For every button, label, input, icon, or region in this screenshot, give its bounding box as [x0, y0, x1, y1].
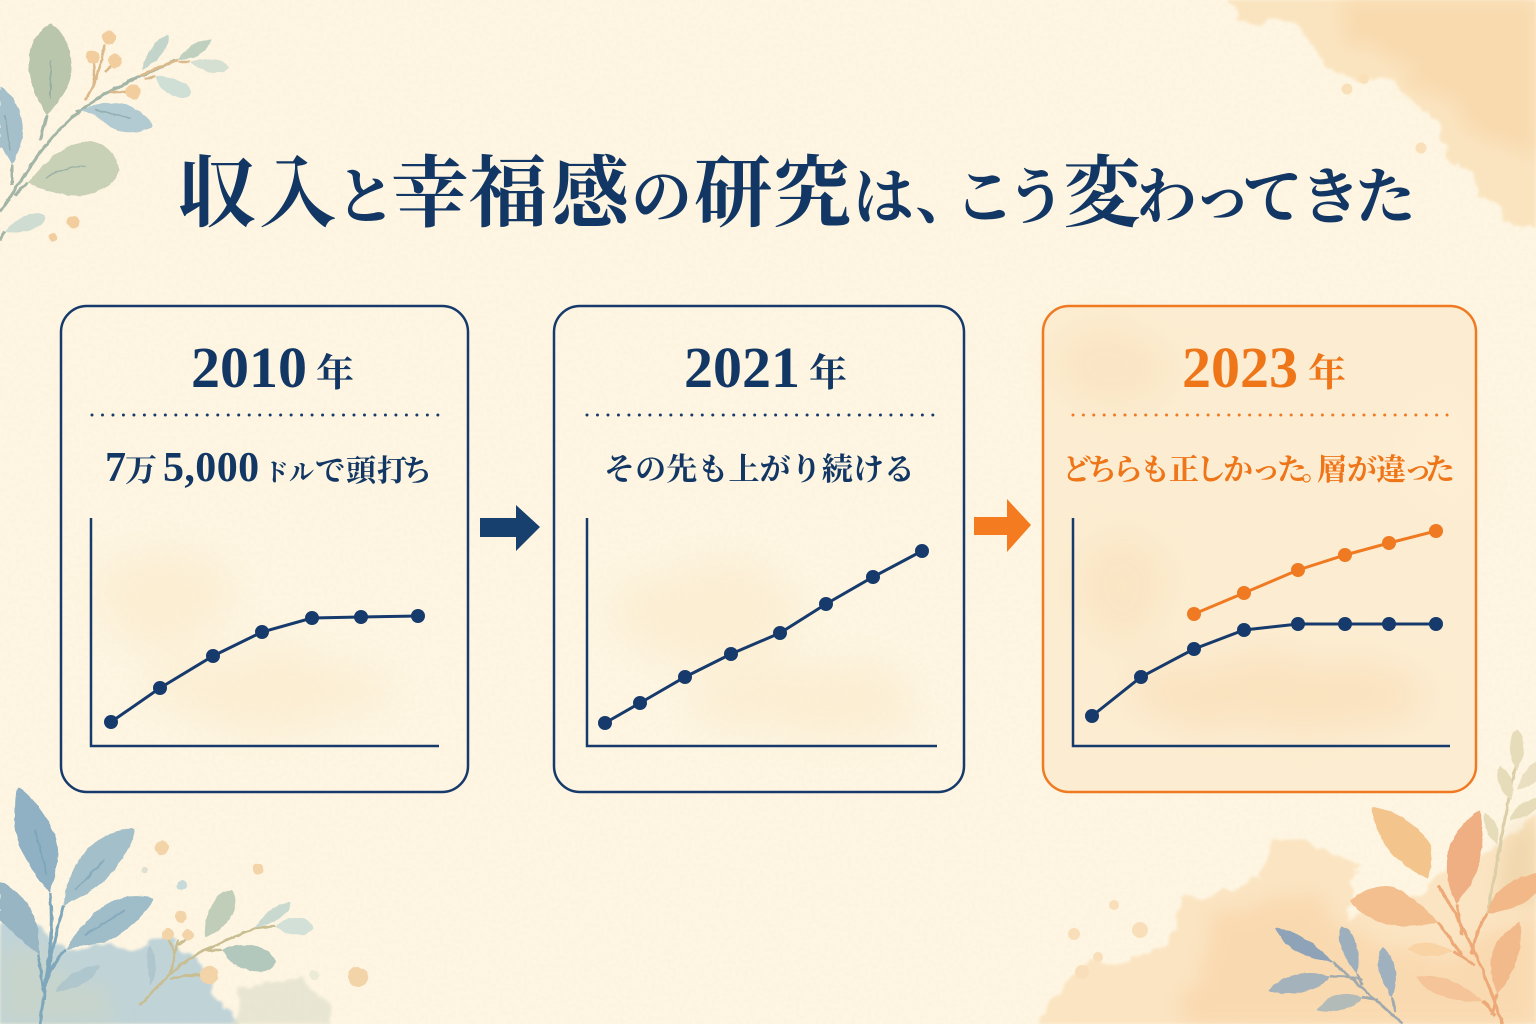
heading 2021: 年 — [809, 353, 847, 395]
veins — [35, 830, 125, 935]
arrow: 2010 to 2021 — [480, 505, 540, 551]
foliage: bottom left — [0, 787, 368, 1024]
caption 2023: どちらも正しかった。層が違った — [1062, 454, 1455, 487]
dotted divider 2023 — [1073, 414, 1448, 416]
blue sprig — [1268, 926, 1402, 1024]
line chart 2010 — [91, 518, 439, 746]
line chart 2023 — [1073, 518, 1450, 746]
watercolor wash: bottom right — [1030, 800, 1536, 1024]
arrow: 2021 to 2023 — [974, 499, 1031, 552]
stems — [0, 60, 175, 212]
leaves — [1372, 807, 1432, 879]
chart wash 2010 — [100, 550, 395, 730]
dotted divider 2010 — [92, 414, 438, 416]
leaves — [15, 787, 58, 893]
panel: 2021 — [554, 306, 964, 792]
title: わってきた — [1136, 165, 1416, 232]
panel fill 2023 — [1043, 306, 1476, 792]
caption 2010: 7 — [105, 445, 126, 491]
title: 幸福感 — [391, 150, 634, 237]
foliage: bottom right — [1268, 729, 1536, 1024]
watercolor wash: bottom left — [0, 925, 350, 1024]
dotted divider 2021 — [587, 414, 933, 416]
heading 2023: 年 — [1308, 353, 1346, 395]
title: と — [335, 165, 396, 232]
orange series — [1187, 524, 1443, 621]
line chart 2021 — [587, 518, 937, 746]
caption 2021: その先も上がり続ける — [604, 452, 915, 487]
panel frame 2010 — [61, 306, 468, 792]
stems — [38, 893, 66, 1024]
caption 2010: ドル — [264, 460, 314, 487]
veins — [5, 60, 130, 178]
stems — [1438, 885, 1502, 1024]
heading 2010: 年 — [316, 353, 354, 395]
title: 変 — [1063, 150, 1144, 237]
heading 2010: 2010 — [191, 335, 307, 400]
panel: 2023 — [1043, 306, 1480, 792]
wash droplets: bottom right — [1068, 900, 1148, 979]
foliage: top left — [0, 24, 229, 242]
heading 2021: 2021 — [684, 335, 800, 400]
navy series — [1085, 617, 1443, 723]
chart wash 2021 — [615, 565, 915, 735]
heading 2023: 2023 — [1182, 335, 1298, 400]
title: 研究 — [694, 150, 851, 237]
panel frame 2021 — [554, 306, 964, 792]
panel: 2010 — [61, 306, 468, 792]
title: 収入 — [178, 150, 337, 237]
watercolor wash: top right — [1222, 0, 1536, 235]
berries — [48, 31, 140, 242]
caption 2010: で — [315, 455, 345, 488]
title: は、こう — [853, 165, 1067, 232]
caption 2010: 頭打ち — [346, 455, 432, 488]
caption 2010: 5,000 — [163, 445, 260, 491]
chart wash 2023 — [1055, 330, 1480, 730]
wash droplets: top right — [1342, 74, 1426, 154]
leaves — [29, 24, 72, 115]
pale branch — [1484, 729, 1536, 914]
caption 2010: 万 — [125, 452, 157, 488]
title: の — [631, 165, 692, 232]
berries and dots — [155, 841, 368, 987]
panel frame 2023 — [1043, 306, 1476, 792]
